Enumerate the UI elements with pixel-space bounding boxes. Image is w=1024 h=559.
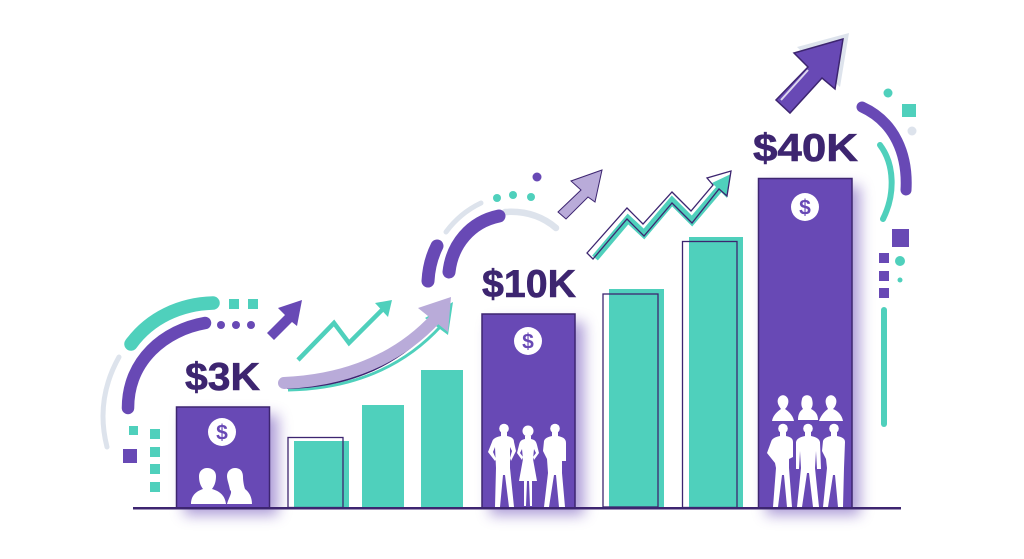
bar: $3K revenue — [176, 356, 278, 515]
bar: teal bar 2 — [362, 405, 404, 507]
icon: large top arrow — [776, 33, 849, 113]
panel: left decorative arcs and dots — [103, 299, 258, 492]
arrow: large swoosh from $3K to $10K — [284, 297, 453, 390]
icon: dollar badge: $ — [216, 422, 228, 444]
icon: two people — [191, 468, 252, 504]
bar: $40K revenue — [753, 127, 860, 515]
bar: $10K revenue — [482, 263, 584, 515]
bar: outlined teal bar 5 — [682, 237, 743, 508]
$40K amount: $40K — [753, 127, 858, 170]
icon: dollar badge: $ — [522, 330, 534, 354]
chart baseline — [133, 507, 901, 510]
bar: outlined teal bar 4 — [603, 289, 664, 507]
icon: three people — [488, 424, 566, 507]
panel: centre decorative arcs and dots — [428, 172, 556, 281]
bar: outlined teal bar 1 — [288, 438, 349, 508]
icon: six people — [767, 395, 845, 507]
panel: right decorative arcs, dots and squares — [862, 88, 916, 424]
$10K amount: $10K — [482, 263, 576, 306]
icon: dollar badge — [514, 327, 542, 355]
icon: dollar badge — [208, 418, 236, 446]
icon: teal zigzag arrow — [298, 300, 392, 360]
icon: dollar badge: $ — [799, 196, 811, 220]
icon: small purple arrow — [267, 300, 302, 340]
bar: teal bar 3 — [421, 370, 463, 507]
$3K amount: $3K — [185, 356, 260, 399]
icon: outlined teal zigzag arrow — [587, 171, 731, 259]
icon: lavender arrow — [558, 170, 602, 219]
icon: dollar badge — [791, 193, 819, 221]
